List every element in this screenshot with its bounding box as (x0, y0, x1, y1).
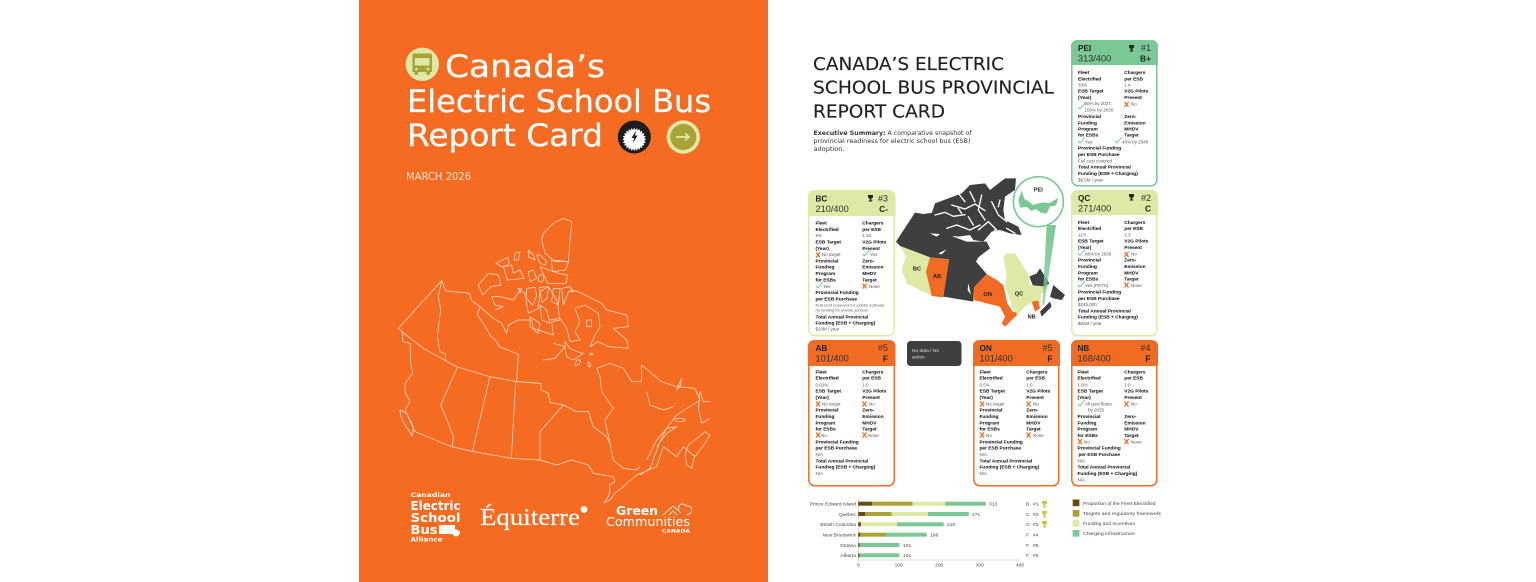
NB metrics: per ESB Purchase (1078, 452, 1120, 458)
BC metrics: Funding (ESB + Charging) (816, 321, 876, 327)
map: provinces of Canada: ON (983, 292, 992, 298)
BC metrics: Program (816, 271, 835, 277)
QC metrics: 11% (1078, 232, 1087, 237)
chart legend: Targets and regulatory framework (1083, 511, 1162, 517)
PEI metrics: 1.4 (1124, 82, 1131, 87)
chart row: Prince Edward Island: #1 (1033, 502, 1039, 508)
chart row: Alberta: #5 (1033, 553, 1039, 559)
BC metrics: Provincial (816, 259, 838, 265)
BC metrics: Chargers (862, 221, 884, 227)
chart row: Alberta: F (1026, 553, 1029, 559)
NB metrics: 1.8% (1078, 382, 1088, 387)
NB metrics: Zero- (1124, 414, 1137, 420)
AB metrics: (Year) (816, 395, 829, 401)
NB metrics: Program (1078, 427, 1097, 433)
QC metrics: ESB Target (1078, 239, 1104, 245)
PEI metrics: V2G Pilots (1124, 89, 1149, 95)
BC metrics: Total Annual Provincial (816, 315, 868, 321)
NB metrics: V2G Pilots (1124, 389, 1149, 395)
AB metrics: per ESB (862, 376, 881, 382)
map: provinces of Canada: AB (933, 274, 941, 280)
QC metrics: Total Annual Provincial (1078, 308, 1131, 314)
PEI metrics: 40% by 2040 (1122, 139, 1149, 144)
AB metrics: 1:0 (862, 382, 869, 387)
heading: infographic title: CANADA’S ELECTRIC (813, 54, 1004, 75)
NB metrics (1078, 369, 1149, 482)
PEI metrics: $9.5M / year (1078, 177, 1104, 182)
NB metrics: Fleet (1078, 369, 1089, 375)
NB metrics: by 2035 (1088, 408, 1105, 413)
BC metrics: Yes (870, 252, 878, 257)
cover title: Electric School Bus (407, 84, 711, 120)
chart row: British Columbia: C- (1026, 522, 1032, 528)
ON metrics: 1:0 (1026, 382, 1033, 387)
AB metrics: No (821, 433, 827, 438)
heading: infographic title: REPORT CARD (813, 102, 945, 122)
AB metrics: Funding (ESB + Charging) (816, 465, 876, 471)
AB metrics: V2G Pilots (862, 389, 887, 395)
BC metrics: per ESB (862, 227, 881, 233)
chart row: New Brunswick: 168 (930, 532, 938, 538)
PEI header: #1 (1141, 43, 1151, 53)
BC metrics: Zero- (862, 259, 875, 265)
PEI metrics: Provincial Funding (1078, 146, 1121, 152)
BC metrics (816, 221, 887, 332)
AB header: 101/400 (816, 354, 849, 364)
ON metrics: Electrified (980, 376, 1003, 382)
NB metrics: (Year) (1078, 395, 1091, 401)
BC metrics: Funding (816, 265, 834, 271)
panel: BC report card (808, 190, 896, 336)
NB header: 168/400 (1078, 354, 1111, 364)
NB metrics: per ESB (1124, 376, 1143, 382)
AB metrics: ESB Target (816, 389, 841, 395)
heading: infographic title: SCHOOL BUS PROVINCIAL (813, 78, 1054, 98)
BC header: C- (879, 204, 888, 214)
BC metrics: No target (822, 252, 841, 257)
chart row: New Brunswick (823, 532, 1039, 538)
NB metrics: Electrified (1078, 376, 1101, 382)
heading: infographic title (813, 54, 1054, 122)
text: executive summary: adoption. (814, 146, 845, 153)
ON header: ON (980, 344, 992, 353)
PEI metrics: Electrified (1078, 76, 1101, 82)
chart axis labels: 200 (935, 562, 944, 568)
AB header (808, 340, 896, 366)
ON metrics: Chargers (1026, 369, 1048, 375)
chart row: New Brunswick: New Brunswick (823, 532, 857, 538)
PEI metrics: per ESB Purchase (1078, 152, 1120, 158)
QC metrics: $92M / year (1078, 321, 1102, 326)
PEI header (1071, 40, 1158, 65)
icon: arrow (667, 120, 700, 154)
logo: Canadian Electric School Bus Alliance: School (410, 511, 460, 525)
icon: bus (406, 48, 439, 81)
AB metrics: per ESB Purchase (816, 446, 857, 452)
PEI metrics: No (1131, 102, 1137, 106)
QC metrics: 1:3 (1124, 232, 1131, 237)
ON metrics: Target (1026, 427, 1041, 433)
ON metrics: N/A (980, 471, 987, 476)
ON metrics: Fleet (980, 369, 991, 375)
AB metrics: Emission (862, 414, 884, 420)
cover title: Canada’s (445, 49, 605, 85)
ON metrics: per ESB Purchase (980, 446, 1021, 452)
AB metrics: N/A (816, 452, 823, 457)
ON metrics: V2G Pilots (1026, 389, 1051, 395)
PEI header: PEI (1078, 44, 1091, 53)
PEI metrics: Program (1078, 127, 1098, 133)
BC header: #3 (878, 194, 888, 204)
ON metrics: Total Annual Provincial (980, 458, 1032, 464)
logo: Green Communities Canada: CANADA (662, 528, 691, 534)
AB header: F (883, 354, 888, 364)
map: provinces of Canada (896, 177, 1065, 327)
chart axis labels: 0 (857, 562, 860, 568)
ON metrics: Funding (980, 414, 998, 420)
AB metrics: Chargers (862, 369, 884, 375)
QC metrics: V2G Pilots (1124, 239, 1149, 245)
chart row: Ontario: Ontario (840, 543, 856, 549)
logo: Equiterre: Équiterre (480, 505, 580, 531)
PEI metrics: (Year) (1078, 95, 1092, 101)
PEI metrics: ESB Target (1078, 89, 1104, 95)
ON metrics: Program (980, 420, 999, 426)
QC metrics (1078, 220, 1149, 326)
ON metrics: Present (1026, 395, 1044, 401)
panel: NB report card (1071, 340, 1158, 486)
chart row: British Columbia: #3 (1033, 522, 1039, 528)
BC metrics: no funding for private schools (816, 308, 868, 312)
PEI metrics (1078, 70, 1149, 182)
NB metrics: Emission (1124, 420, 1146, 426)
BC metrics: Present (862, 246, 880, 252)
cover date: MARCH 2026 (406, 171, 471, 183)
panel: ON report card (973, 340, 1060, 486)
legend: no data: action (912, 354, 925, 360)
AB metrics: Zero- (862, 408, 875, 414)
QC metrics: for ESBs (1078, 277, 1099, 283)
chart row: Ontario: #5 (1033, 543, 1039, 549)
chart legend: Funding and incentives (1083, 521, 1136, 527)
AB metrics: MHDV (862, 420, 877, 426)
map: Canada outline (398, 218, 710, 503)
NB metrics: Total Annual Provincial (1078, 465, 1130, 471)
NB metrics: Funding (1078, 420, 1096, 426)
chart axis labels (857, 562, 1024, 568)
QC metrics: None (1131, 283, 1142, 288)
BC metrics: MHDV (862, 271, 877, 277)
text: executive summary (814, 130, 972, 153)
chart row: Quebec (839, 511, 1047, 518)
BC metrics: Electrified (816, 227, 839, 233)
NB metrics: No (1084, 439, 1090, 444)
NB metrics: N/A (1078, 477, 1085, 482)
ON metrics: Provincial Funding (980, 439, 1023, 445)
NB metrics: Chargers (1124, 369, 1146, 375)
PEI metrics: Full cost covered (1078, 158, 1113, 163)
text: executive summary: provincial readiness for electric school bus (ESB) (814, 138, 970, 145)
ON header (973, 340, 1060, 366)
panel: report cover (359, 0, 768, 582)
NB metrics: Present (1124, 395, 1142, 401)
chart legend (1073, 500, 1162, 537)
QC metrics: Program (1078, 270, 1098, 276)
AB metrics: for ESBs (816, 427, 836, 433)
chart row: Prince Edward Island: B (1026, 502, 1029, 508)
QC metrics: per ESB (1124, 226, 1143, 232)
BC metrics: 5% (816, 233, 822, 238)
chart row: New Brunswick: F (1026, 532, 1029, 538)
map: provinces of Canada: BC (913, 266, 921, 272)
NB metrics: Funding (ESB + Charging) (1078, 471, 1138, 477)
BC header: 210/400 (816, 204, 849, 214)
chart row: Alberta (840, 553, 1039, 559)
QC metrics: Target (1124, 277, 1139, 283)
NB metrics: No (1131, 401, 1137, 406)
QC metrics: No (1131, 252, 1137, 257)
QC metrics: Provincial Funding (1078, 290, 1121, 296)
ON header: F (1047, 354, 1052, 364)
NB metrics: None (1131, 439, 1142, 444)
BC metrics: Full cost covered for public schools, (816, 302, 886, 307)
QC metrics: 88% by 2030 (1085, 252, 1112, 257)
BC metrics: $10M / year (816, 327, 840, 332)
ON metrics: for ESBs (980, 427, 1000, 433)
panel: PEI report card (1071, 40, 1158, 186)
chart axis labels: 400 (1016, 562, 1024, 568)
QC metrics: Fleet (1078, 220, 1090, 226)
map: provinces of Canada: NB (1028, 314, 1036, 320)
QC header: 271/400 (1078, 204, 1111, 214)
BC metrics: Emission (862, 265, 884, 271)
PEI metrics: Target (1124, 133, 1139, 139)
PEI metrics: Yes (1085, 139, 1093, 144)
map: provinces of Canada: PEI (1034, 188, 1043, 194)
PEI metrics: 33% (1078, 82, 1087, 87)
BC metrics: Provincial Funding (816, 290, 859, 296)
logo: Canadian Electric School Bus Alliance: Alliance (410, 536, 443, 544)
ON metrics: (Year) (980, 395, 993, 401)
NB metrics: for ESBs (1078, 433, 1098, 439)
AB metrics: Target (862, 427, 877, 433)
QC metrics: (Year) (1078, 245, 1092, 251)
logo: Canadian Electric School Bus Alliance: Bus (410, 523, 438, 537)
QC metrics: Funding (1078, 264, 1097, 270)
logo: Canadian Electric School Bus Alliance (410, 491, 460, 544)
chart row: New Brunswick: #4 (1033, 532, 1039, 538)
chart row: British Columbia (820, 521, 1047, 528)
BC metrics: Fleet (816, 221, 827, 227)
legend: no data: No data / No (912, 348, 939, 354)
chart row: Quebec: 271 (972, 512, 980, 518)
chart row: Ontario: 101 (903, 543, 911, 549)
ON metrics: ESB Target (980, 389, 1005, 395)
PEI header: 313/400 (1078, 54, 1111, 64)
PEI metrics: Present (1124, 95, 1142, 101)
PEI metrics: per ESB (1124, 76, 1143, 82)
bar chart: provincial scores (810, 498, 1047, 568)
logo: Green Communities Canada (606, 504, 692, 534)
BC metrics: None (869, 284, 880, 289)
ON metrics: No (1033, 401, 1039, 406)
BC metrics: for ESBs (816, 278, 836, 284)
ON metrics: N/A (980, 452, 987, 457)
AB metrics: Provincial (816, 408, 838, 414)
chart row: Prince Edward Island (810, 501, 1047, 508)
AB header: #5 (878, 343, 888, 353)
chart row: Alberta: Alberta (840, 553, 856, 559)
AB metrics: Funding (816, 414, 834, 420)
AB metrics: N/A (816, 471, 823, 476)
QC header: QC (1078, 194, 1090, 203)
QC metrics: MHDV (1124, 270, 1139, 276)
logo: Green Communities Canada: Green (616, 504, 658, 518)
ON metrics: per ESB (1026, 376, 1045, 382)
PEI metrics: Provincial (1078, 114, 1101, 120)
AB metrics: Program (816, 420, 835, 426)
ON metrics: None (1033, 433, 1044, 438)
ON header: 101/400 (980, 354, 1013, 364)
NB metrics: All govt fleets (1085, 401, 1113, 406)
QC header (1071, 190, 1158, 215)
PEI metrics: Fleet (1078, 70, 1090, 76)
BC metrics: (Year) (816, 246, 829, 252)
chart axis labels: 100 (895, 562, 903, 568)
AB metrics: Present (862, 395, 880, 401)
AB metrics: Total Annual Provincial (816, 458, 868, 464)
ON metrics (980, 369, 1051, 476)
PEI header: B+ (1140, 54, 1151, 64)
AB metrics: No (869, 401, 875, 406)
QC metrics: Funding (ESB + Charging) (1078, 315, 1138, 321)
PEI metrics: MHDV (1124, 127, 1139, 133)
AB metrics: Electrified (816, 376, 839, 382)
ON metrics: No (986, 433, 992, 438)
NB header: F (1145, 354, 1150, 364)
QC header: #2 (1141, 193, 1151, 203)
map: provinces of Canada: QC (1015, 292, 1023, 298)
NB metrics: MHDV (1124, 427, 1139, 433)
NB metrics: Provincial (1078, 414, 1100, 420)
QC metrics: $245,000 (1078, 302, 1097, 307)
ON metrics: Zero- (1026, 408, 1039, 414)
chart row: British Columbia: 210 (947, 522, 955, 528)
BC metrics: ESB Target (816, 240, 841, 246)
chart row: Prince Edward Island: Prince Edward Island (810, 502, 856, 508)
QC metrics: per ESB Purchase (1078, 296, 1120, 302)
PEI metrics: 100% by 2030 (1084, 108, 1114, 113)
NB metrics: 1:0 (1124, 382, 1131, 387)
chart row: Quebec: #2 (1033, 512, 1039, 518)
PEI metrics: Zero- (1124, 114, 1137, 120)
PEI metrics: for ESBs (1078, 133, 1099, 139)
BC metrics: per ESB Purchase (816, 297, 857, 303)
AB metrics: Fleet (816, 369, 827, 375)
chart axis labels: 300 (976, 562, 984, 568)
AB metrics: No target (822, 401, 841, 406)
PEI metrics: Chargers (1124, 70, 1146, 76)
NB metrics: Provincial Funding (1078, 446, 1121, 452)
cover title (407, 49, 711, 154)
NB metrics: ESB Target (1078, 389, 1103, 395)
chart row: Quebec: C (1026, 512, 1030, 518)
QC metrics: Electrified (1078, 226, 1101, 232)
QC metrics: Provincial (1078, 258, 1101, 264)
ON metrics: Funding (ESB + Charging) (980, 465, 1040, 471)
legend: no data (907, 341, 962, 366)
NB header: #4 (1140, 343, 1150, 353)
ON metrics: Provincial (980, 408, 1002, 414)
AB metrics: Provincial Funding (816, 439, 859, 445)
chart row: Prince Edward Island: 313 (989, 502, 997, 508)
icon: charging spark (618, 120, 651, 154)
QC metrics: Emission (1124, 264, 1146, 270)
QC metrics: Yes (PETS) (1085, 283, 1109, 288)
BC header (808, 190, 896, 216)
panel: AB report card (808, 340, 896, 486)
NB metrics: Target (1124, 433, 1139, 439)
logo: Canadian Electric School Bus Alliance: Electric (410, 499, 460, 513)
NB metrics: N/A (1078, 458, 1085, 463)
PEI metrics: Funding (1078, 120, 1097, 126)
NB header (1071, 340, 1158, 366)
cover title: Report Card (407, 118, 603, 154)
chart row: Ontario: F (1026, 543, 1029, 549)
AB header: AB (816, 344, 827, 353)
PEI metrics: Funding (ESB + Charging) (1078, 171, 1138, 177)
chart row: Ontario (840, 543, 1039, 549)
AB metrics: 0.02% (816, 382, 828, 387)
text: executive summary: Executive Summary: A comparative snapshot of (814, 130, 972, 137)
QC metrics: Chargers (1124, 220, 1146, 226)
PEI metrics: Total Annual Provincial (1078, 165, 1131, 171)
logo: Canadian Electric School Bus Alliance: Canadian (410, 491, 451, 499)
ON header: #5 (1042, 343, 1052, 353)
BC metrics: 1:15 (862, 233, 872, 238)
NB header: NB (1078, 344, 1089, 353)
AB metrics (816, 369, 887, 476)
chart legend: Proportion of the Fleet Electrified (1083, 501, 1156, 507)
QC metrics: Zero- (1124, 258, 1137, 264)
logo: Green Communities Canada: Communities (606, 515, 690, 529)
AB metrics: None (868, 433, 879, 438)
chart row: Alberta: 101 (903, 553, 911, 559)
BC metrics: Target (862, 278, 877, 284)
panel: QC report card (1071, 190, 1158, 336)
ON metrics: MHDV (1026, 420, 1041, 426)
chart row: British Columbia: British Columbia (820, 522, 856, 528)
QC header: C (1145, 204, 1151, 214)
PEI metrics: Emission (1124, 120, 1146, 126)
ON metrics: No target (986, 401, 1005, 406)
BC header: BC (816, 194, 827, 204)
ON metrics: 0.5% (980, 382, 990, 387)
chart legend: Charging infrastructure (1083, 531, 1135, 537)
BC metrics: V2G Pilots (862, 240, 887, 246)
ON metrics: Emission (1026, 414, 1048, 420)
QC metrics: Present (1124, 245, 1142, 251)
chart row: Quebec: Québec (839, 512, 857, 518)
BC metrics: Yes (823, 284, 831, 289)
PEI metrics: 50% by 2027; (1084, 101, 1112, 106)
